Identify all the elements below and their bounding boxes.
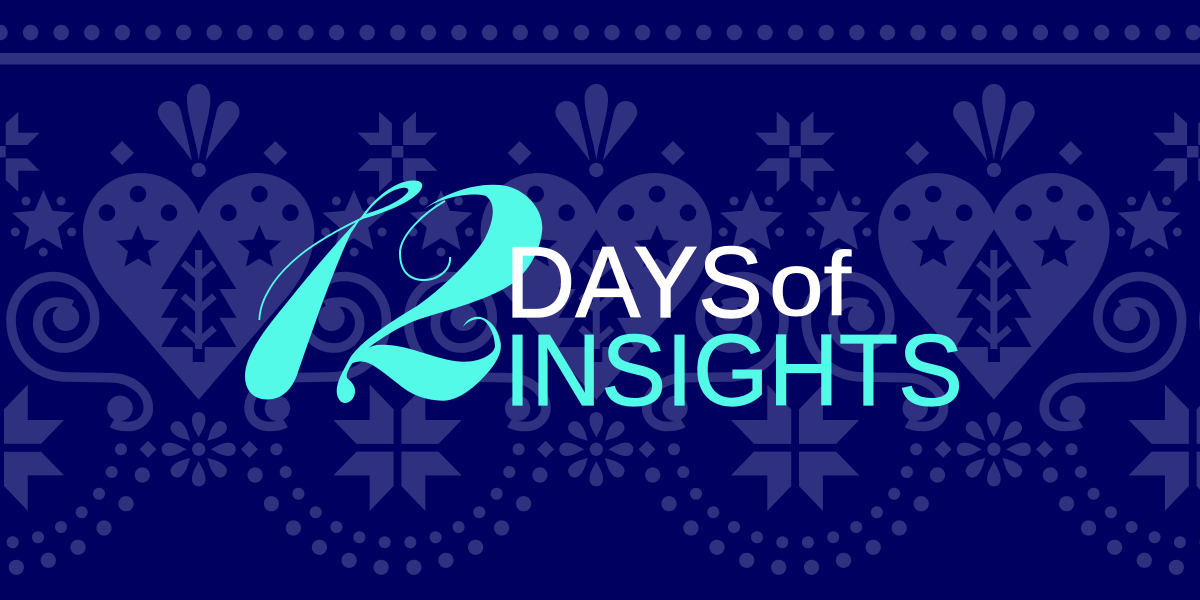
heading: of: of bbox=[769, 235, 852, 335]
numeral 1 body bbox=[245, 215, 363, 400]
folk pattern: heart motif 4 edge bbox=[1129, 84, 1200, 575]
numeral 1 swash bbox=[259, 216, 366, 320]
dotted border row bbox=[0, 25, 1200, 40]
folk pattern: heart motif 3 bbox=[731, 84, 1200, 575]
script numeral 12 bbox=[245, 180, 542, 403]
numeral 2 top body and neck bbox=[337, 185, 542, 403]
horizontal band bbox=[0, 53, 1200, 64]
numeral 2 bottom wave bbox=[348, 317, 501, 401]
numeral 1 top loop bbox=[360, 180, 422, 219]
folk pattern: heart motif 1 bbox=[0, 84, 461, 575]
heading: DAYS: DAYS bbox=[505, 227, 763, 339]
heading: INSIGHTS: INSIGHTS bbox=[504, 315, 963, 427]
numeral 2 curl bbox=[400, 201, 450, 280]
folk pattern: heart motif 2 bbox=[334, 84, 859, 575]
